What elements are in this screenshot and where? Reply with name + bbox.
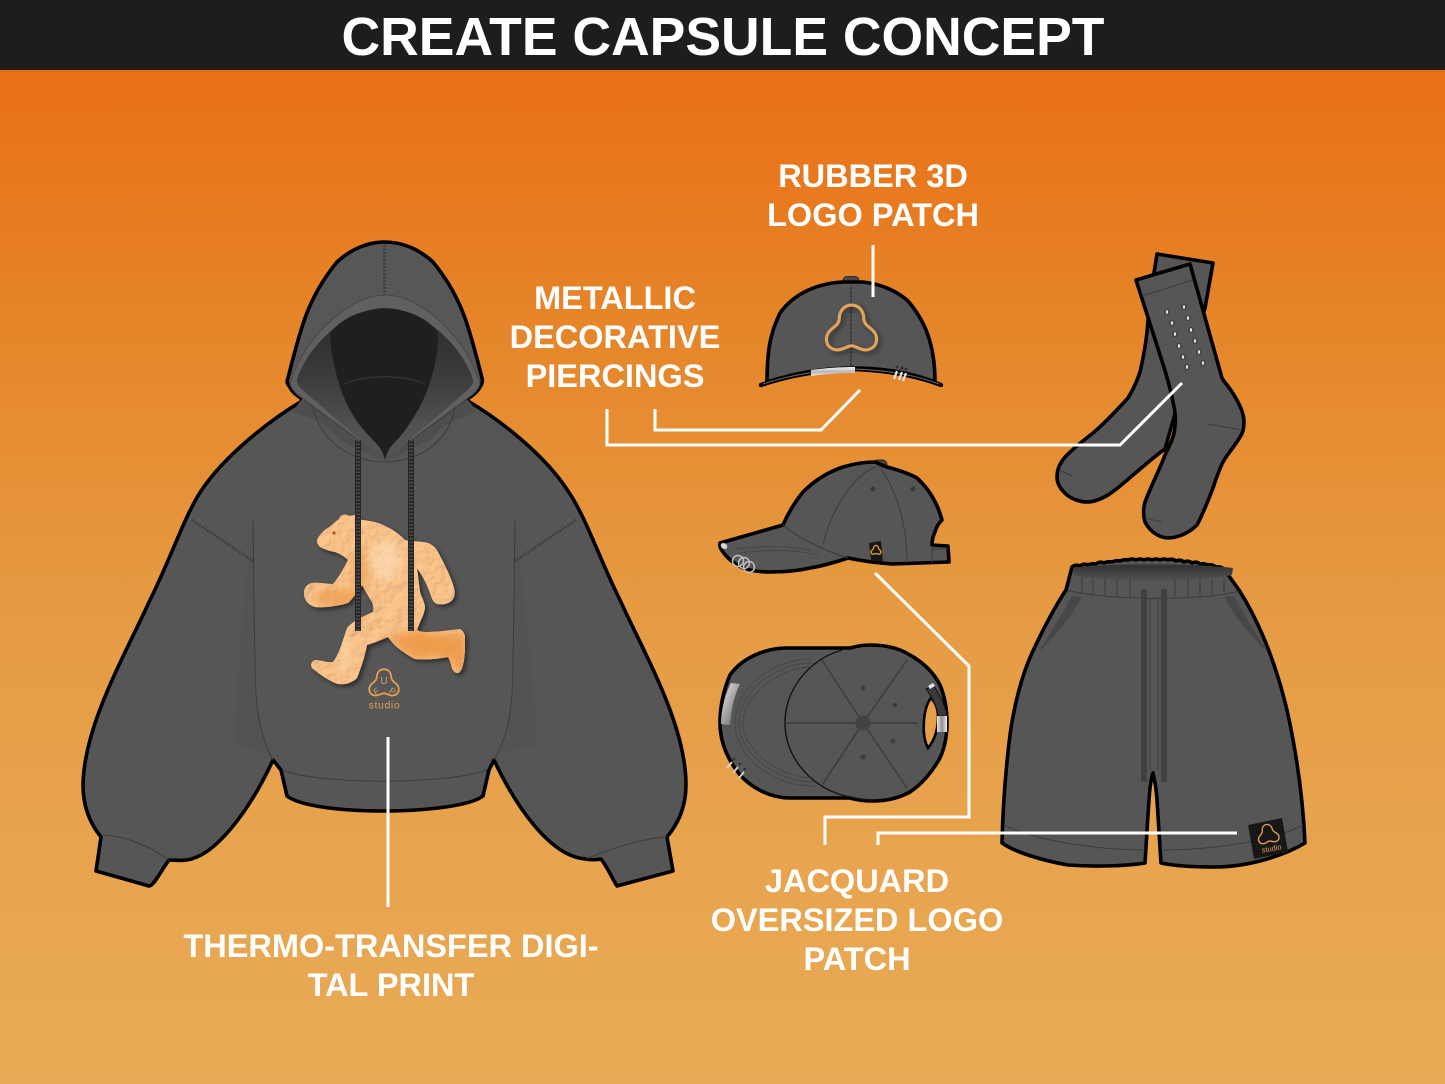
- hood shell: [287, 242, 482, 462]
- brim stud: [720, 542, 728, 550]
- label: rubber logo patch: LOGO PATCH: [767, 197, 979, 233]
- waistband inside: [1073, 564, 1233, 581]
- leader line: thermo print: [386, 737, 390, 907]
- cap button: [843, 276, 859, 284]
- label: thermo-transfer print: TAL PRINT: [308, 967, 474, 1003]
- leader line: piercings to cap: [655, 390, 860, 430]
- left drawstring: [355, 440, 361, 631]
- body side seams: [253, 521, 515, 760]
- label: rubber logo patch: RUBBER 3D: [778, 158, 968, 194]
- label: metallic piercings: DECORATIVE: [510, 319, 720, 355]
- hood center stitch: [383, 245, 386, 295]
- metal bar: [811, 367, 855, 376]
- hub: [856, 716, 870, 730]
- metal tip: [928, 683, 935, 689]
- cap dome: [767, 282, 935, 382]
- shorts outline: [1002, 559, 1305, 867]
- hood outline: [287, 242, 482, 399]
- crown edge: [785, 650, 873, 800]
- garment: cap front view: [761, 276, 941, 385]
- right shorts drawstring: [1161, 588, 1167, 782]
- brim stitching: [733, 547, 818, 555]
- hoodie logo: F: [372, 685, 382, 697]
- side cap outline: [720, 462, 949, 572]
- rubber logo: [826, 305, 877, 350]
- leader line: jacquard to cap: [825, 573, 969, 845]
- shorts patch: [1248, 818, 1288, 859]
- side cap panel seams: [783, 466, 907, 563]
- leader line: piercings to socks: [607, 383, 1182, 445]
- inner neck line: [343, 377, 425, 385]
- title banner: [0, 0, 1445, 70]
- label: jacquard patch: OVERSIZED LOGO: [711, 902, 1003, 938]
- underside outline: [720, 645, 947, 801]
- bear silhouette: [304, 515, 465, 684]
- sock cuff and heel lines: [1060, 280, 1242, 522]
- label: thermo-transfer print: THERMO-TRANSFER DIGI-: [183, 928, 599, 964]
- title banner: CREATE CAPSULE CONCEPT: [342, 8, 1105, 67]
- side cap strap line: [932, 546, 948, 563]
- shoulder shadow: [292, 399, 478, 462]
- leader line: rubber logo patch: [872, 245, 874, 297]
- neckline: [313, 408, 455, 462]
- sock metal studs: [1164, 304, 1206, 370]
- side patch: [869, 541, 883, 562]
- left shorts drawstring: [1141, 588, 1147, 782]
- metal strap: [937, 716, 947, 732]
- shoulder stitches: [192, 520, 576, 561]
- back strap: [926, 686, 947, 716]
- back sock: [1057, 254, 1213, 502]
- brim stitching: [735, 659, 815, 786]
- fly lines: [1150, 598, 1158, 770]
- leader line: jacquard to shorts: [878, 833, 1237, 845]
- bear print: [300, 510, 470, 690]
- hem line: [1004, 825, 1303, 850]
- eyelets: [870, 486, 916, 492]
- label: metallic piercings: METALLIC: [534, 280, 696, 316]
- garment: hoodie: [83, 242, 686, 886]
- label: metallic piercings: PIERCINGS: [526, 358, 704, 394]
- hoodie logo: P: [387, 686, 398, 697]
- back opening: [924, 698, 938, 748]
- hoodie logo: [369, 669, 400, 712]
- waistband seam: [1067, 590, 1239, 598]
- hoodie logo: U: [380, 676, 388, 687]
- right pocket: [1225, 597, 1266, 650]
- panel seams: [785, 660, 918, 788]
- dark inner hood: [330, 309, 438, 460]
- waistband gathers: [1082, 577, 1224, 597]
- hoodie body outline: [83, 401, 686, 886]
- bear texture and shading: [304, 514, 465, 684]
- label: jacquard patch: PATCH: [803, 941, 911, 977]
- garment: cap side view: [720, 460, 949, 572]
- metal brim bar: [721, 683, 740, 725]
- label: jacquard patch: JACQUARD: [765, 863, 949, 899]
- underside piercings: [727, 758, 746, 778]
- hood interior: [297, 308, 473, 460]
- brim rings: [732, 556, 754, 572]
- brim piercings: [894, 366, 908, 381]
- sleeve shading: [235, 521, 537, 752]
- cap center seam: [850, 287, 852, 366]
- garment: socks: [1057, 254, 1244, 538]
- hem and cuff ribs: [104, 770, 667, 860]
- side cap button: [873, 460, 887, 469]
- front sock: [1136, 264, 1244, 538]
- garment: cap underside view: [720, 645, 947, 801]
- shorts patch: studio: [1261, 842, 1282, 855]
- right drawstring: [408, 440, 414, 631]
- left pocket: [1040, 597, 1081, 650]
- garment: shorts: [1002, 559, 1305, 867]
- cap brim: [761, 369, 941, 385]
- collar fold lines: [304, 400, 466, 445]
- hoodie logo: studio: [369, 700, 400, 712]
- bear eye: [332, 531, 336, 535]
- eyelets: [860, 685, 898, 760]
- hood band: [290, 295, 480, 460]
